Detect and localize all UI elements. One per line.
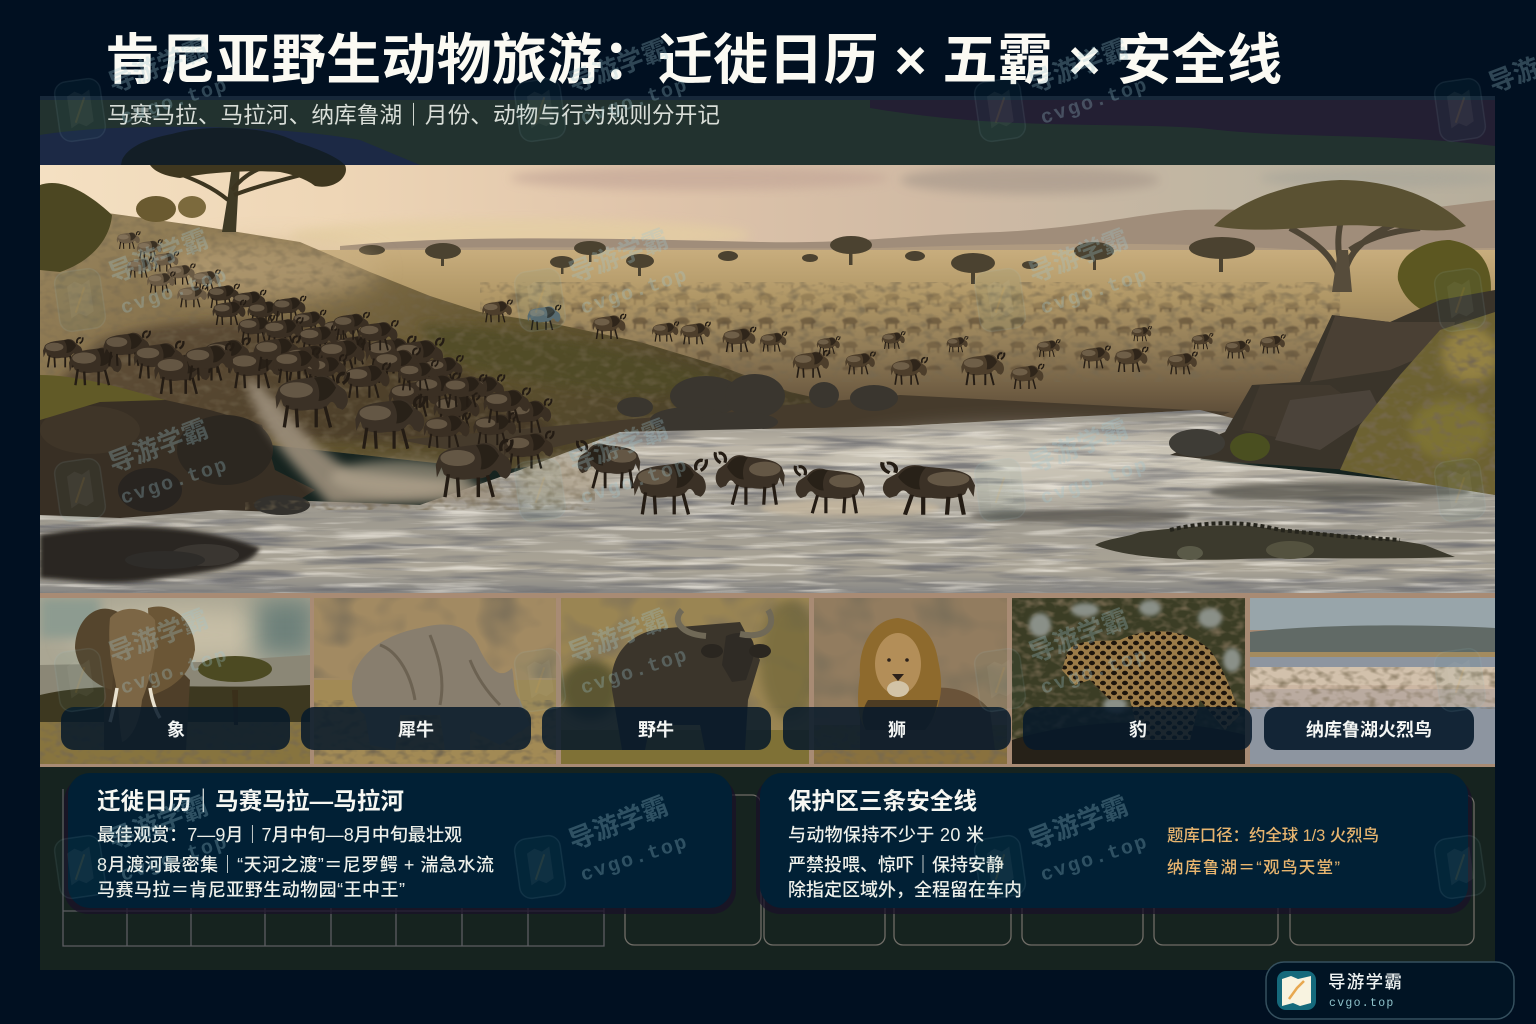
- rule box outlines: [625, 795, 1474, 945]
- calendar grid remnant: [63, 789, 604, 946]
- distant herd texture: [480, 282, 1359, 371]
- watermark grid: 导游学霸: [1024, 413, 1132, 479]
- text: river crossing facts: 8月渡河最密集｜“天河之渡”＝尼罗鳄 + 湍急水流: [97, 855, 494, 875]
- hilltop acacia and bush: [40, 165, 346, 272]
- watermark grid: cvgo.top: [578, 831, 692, 888]
- watermark grid: 导游学霸: [1024, 33, 1132, 99]
- thumbnail: buffalo: [560, 598, 820, 764]
- sky: [40, 165, 1495, 250]
- brand badge: [1266, 962, 1514, 1019]
- watermark grid: 导游学霸: [104, 790, 212, 856]
- left hillside: [40, 213, 812, 469]
- watermark grid: cvgo.top: [578, 644, 692, 701]
- shore rocks: [400, 374, 1230, 460]
- far hills: [340, 200, 1495, 250]
- watermark grid: 导游学霸: [564, 413, 672, 479]
- hillside herd: [117, 231, 220, 307]
- label: leopard: 豹: [1129, 720, 1147, 740]
- left rock bank: [40, 375, 315, 518]
- watermark grid: 导游学霸: [104, 603, 212, 669]
- label: rhino: 犀牛: [398, 720, 434, 740]
- label: lion: [783, 707, 1011, 750]
- thumbnail: elephant: [40, 598, 315, 764]
- watermark grid: 导游学霸: [1024, 603, 1132, 669]
- label: rhino: [301, 707, 531, 750]
- watermark grid: cvgo.top: [118, 644, 232, 701]
- distant acacia trees: [359, 236, 1255, 284]
- watermark grid: cvgo.top: [1038, 644, 1152, 701]
- icon: map logo: [1277, 971, 1316, 1010]
- watermark grid: 导游学霸: [104, 33, 212, 99]
- large acacia right: [1214, 180, 1466, 292]
- watermark grid: cvgo.top: [578, 74, 692, 131]
- panel: migration calendar: [64, 773, 736, 914]
- panel: top subtitle band: [40, 96, 1495, 170]
- watermark grid: cvgo.top: [1038, 74, 1152, 131]
- watermark grid: 导游学霸: [564, 223, 672, 289]
- label: buffalo: 野牛: [638, 720, 674, 740]
- watermark grid: cvgo.top: [578, 264, 692, 321]
- thumbnail: lion: [814, 598, 1007, 764]
- watermark grid: cvgo.top: [1038, 831, 1152, 888]
- label: flamingos: [1264, 707, 1474, 750]
- subtitle: 马赛马拉、马拉河、纳库鲁湖｜月份、动物与行为规则分开记: [107, 102, 720, 128]
- watermark grid: cvgo.top: [1038, 264, 1152, 321]
- savanna plain: [319, 250, 1495, 418]
- text: no feeding: 严禁投喂、惊吓｜保持安静: [788, 855, 1004, 875]
- right bank rocks and grass: [1169, 290, 1498, 495]
- callout: bird paradise: 纳库鲁湖＝“观鸟天堂”: [1167, 858, 1340, 877]
- watermark grid: 导游学霸: [1024, 223, 1132, 289]
- text: best viewing months: 最佳观赏：7—9月｜7月中旬—8月中旬最壮观: [97, 825, 462, 845]
- thumbnail: flamingos: [1250, 598, 1495, 764]
- foreground wildebeest crossing: [276, 372, 975, 515]
- crocodile: [1095, 523, 1455, 560]
- midground herd: [482, 300, 1285, 389]
- watermark grid: cvgo.top: [118, 264, 232, 321]
- watermark grid: cvgo.top: [118, 454, 232, 511]
- splash and foam: [245, 375, 1190, 523]
- thumbnail: leopard: [1012, 598, 1245, 764]
- watermark grid: 导游学霸: [564, 603, 672, 669]
- thumbnail: rhino: [314, 598, 556, 764]
- label: lion: 狮: [888, 720, 906, 740]
- watermark grid: cvgo.top: [1038, 454, 1152, 511]
- watermark grid: 导游学霸: [1024, 790, 1132, 856]
- watermark grid: 导游学霸: [564, 790, 672, 856]
- text: stay in vehicle: 除指定区域外，全程留在车内: [788, 879, 1022, 900]
- watermark grid: 导游学霸: [104, 223, 212, 289]
- heading: safety lines: 保护区三条安全线: [788, 788, 977, 814]
- label: elephant: 象: [167, 720, 185, 740]
- label: leopard: [1023, 707, 1252, 750]
- heading: migration calendar: 迁徙日历｜马赛马拉—马拉河: [97, 787, 404, 814]
- watermark grid: cvgo.top: [118, 831, 232, 888]
- brand name: 导游学霸: [1328, 972, 1403, 992]
- hero photo: wildebeest river crossing: [40, 165, 1500, 600]
- text: keep distance: 与动物保持不少于 20 米: [788, 825, 984, 845]
- callout: flamingo share: 题库口径：约全球 1/3 火烈鸟: [1167, 825, 1379, 845]
- label: elephant: [61, 707, 290, 750]
- watermark grid: cvgo.top: [578, 454, 692, 511]
- label: buffalo: [542, 707, 771, 750]
- brand url: cvgo.top: [1329, 997, 1395, 1010]
- label: flamingos: 纳库鲁湖火烈鸟: [1306, 719, 1432, 740]
- watermark grid: 导游学霸: [564, 33, 672, 99]
- photo strip frame: [40, 593, 1495, 767]
- text: Masai Mara title: 马赛马拉＝肯尼亚野生动物园“王中王”: [97, 879, 405, 900]
- panel: three safety lines: [756, 773, 1472, 914]
- title: 肯尼亚野生动物旅游：迁徙日历 × 五霸 × 安全线: [105, 29, 1282, 91]
- river: [40, 405, 1495, 600]
- watermark grid: cvgo.top: [118, 74, 232, 131]
- bush right: [1398, 240, 1491, 309]
- watermark grid: 导游学霸: [104, 413, 212, 479]
